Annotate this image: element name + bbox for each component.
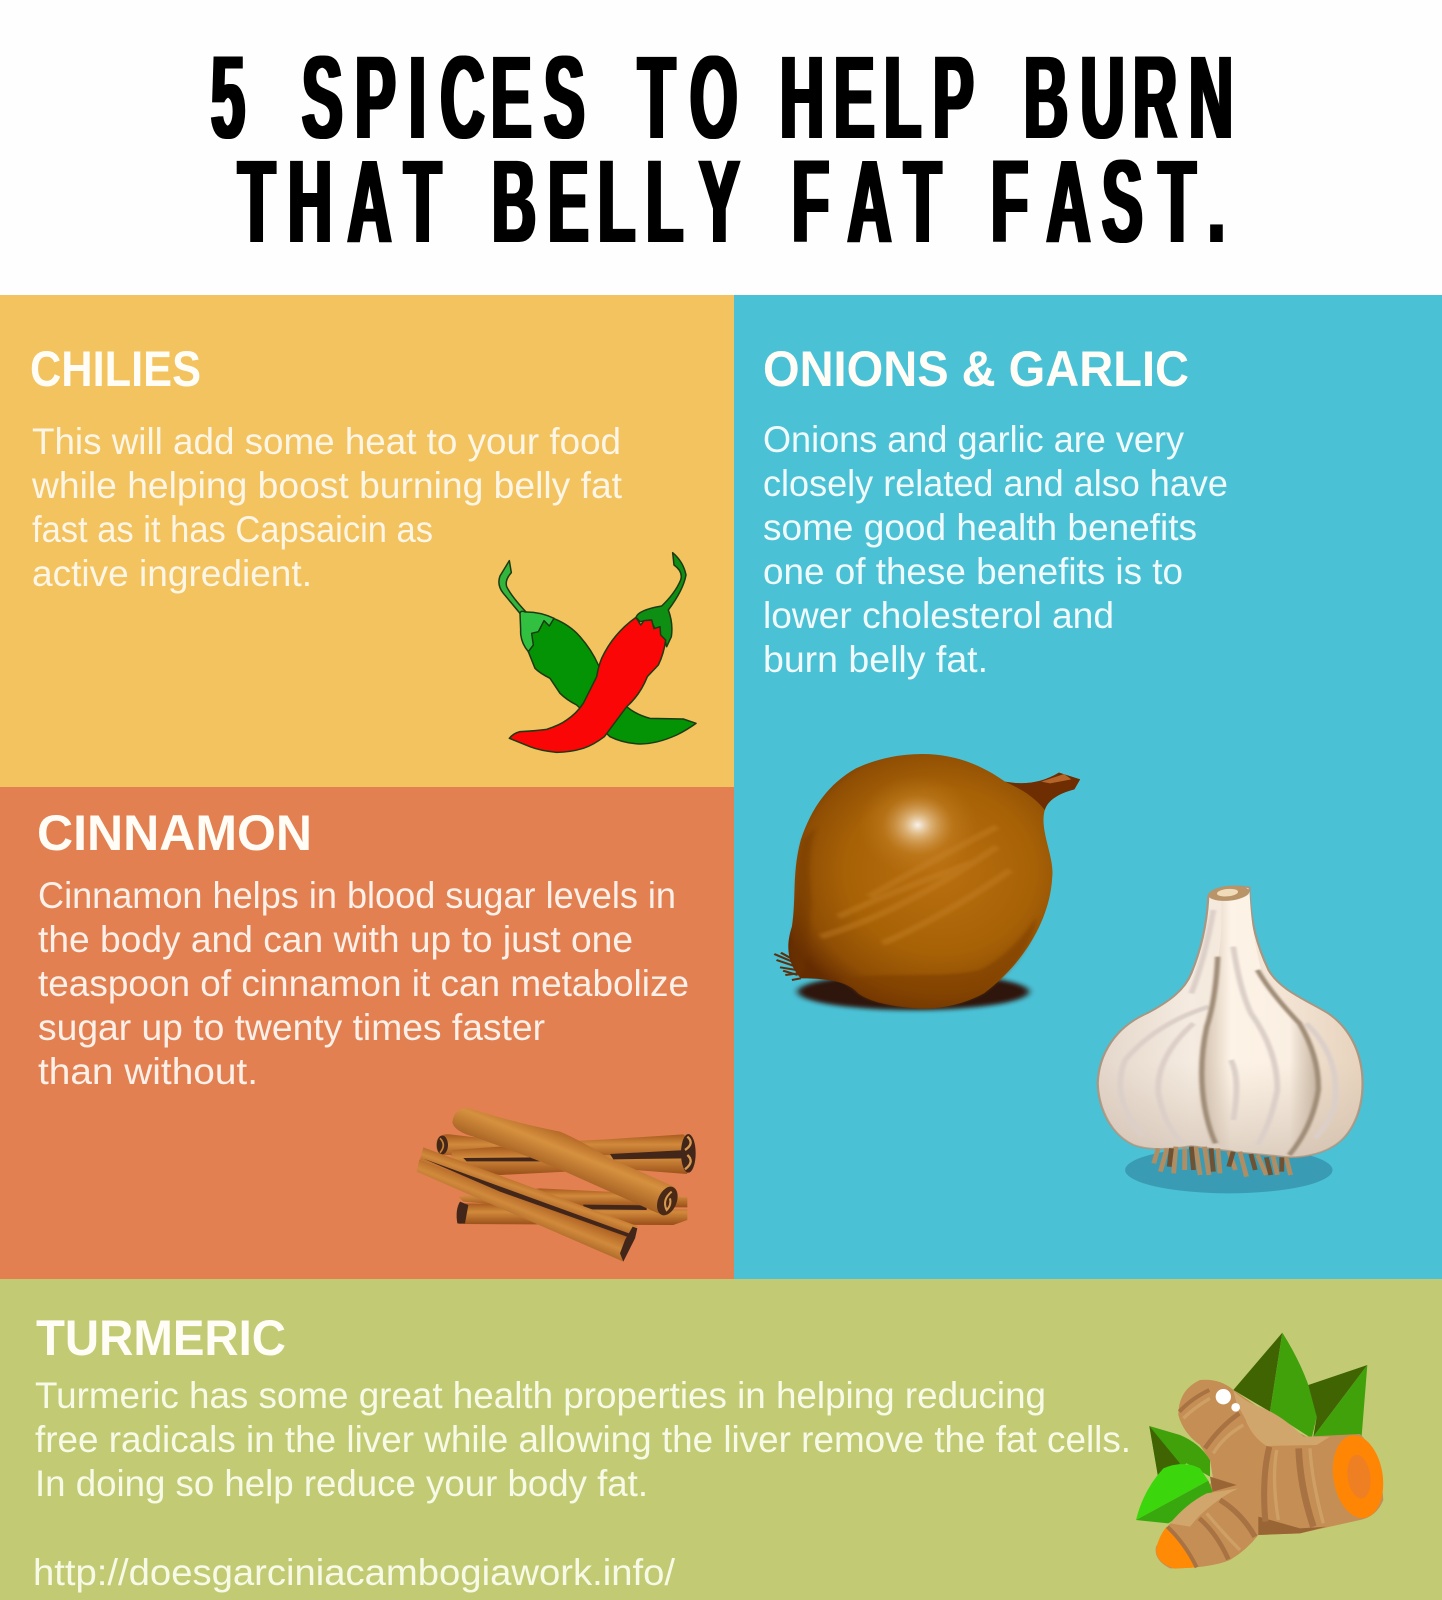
icon: onion [774,754,1080,1010]
title [211,31,1233,267]
text block: chilies: active ingredient. [32,553,312,594]
title: THAT BELLY FAT FAST. [238,135,1225,267]
text block: chilies: while helping boost burning belly fat [31,465,623,506]
text block: cinnamon: than without. [38,1051,258,1092]
text block: onions and garlic [763,419,1228,680]
text block: turmeric: In doing so help reduce your body fat. [35,1463,648,1504]
text block: chilies: This will add some heat to your food [32,421,621,462]
icon: turmeric root with leaves [1136,1333,1389,1569]
icon: cinnamon sticks [417,1108,696,1262]
heading: onions and garlic: ONIONS & GARLIC [763,341,1189,397]
text block: onions and garlic: Onions and garlic are very [763,419,1184,460]
text block: turmeric: free radicals in the liver while allowing the liver remove the fat cells. [35,1419,1131,1460]
title: 5 SPICES TO HELP BURN [211,31,1233,163]
icon: garlic bulb [1098,884,1363,1193]
panel: turmeric [0,1279,1442,1600]
text block: onions and garlic: closely related and also have [763,463,1228,504]
text block: onions and garlic: lower cholesterol and [763,595,1114,636]
panel: cinnamon [0,787,734,1279]
text block: cinnamon [38,875,689,1092]
text block: chilies [31,421,623,594]
heading: cinnamon: CINNAMON [37,805,312,861]
text block: turmeric: Turmeric has some great health properties in helping reducing [35,1375,1046,1416]
text block: cinnamon: Cinnamon helps in blood sugar levels in [38,875,676,916]
text block: cinnamon: the body and can with up to just one [38,919,633,960]
panel: chilies [0,295,734,787]
icon: crossed chili peppers [499,553,696,752]
website url: http://doesgarciniacambogiawork.info/ [33,1552,676,1593]
text block: onions and garlic: some good health benefits [763,507,1197,548]
text block: cinnamon: teaspoon of cinnamon it can metabolize [38,963,689,1004]
heading: chilies: CHILIES [30,341,201,397]
heading: turmeric: TURMERIC [36,1310,286,1366]
text block: onions and garlic: one of these benefits is to [763,551,1183,592]
panel: onions and garlic [734,295,1442,1279]
text block: chilies: fast as it has Capsaicin as [32,509,433,550]
text block: turmeric [35,1375,1131,1504]
text block: onions and garlic: burn belly fat. [763,639,988,680]
text block: cinnamon: sugar up to twenty times faster [38,1007,545,1048]
